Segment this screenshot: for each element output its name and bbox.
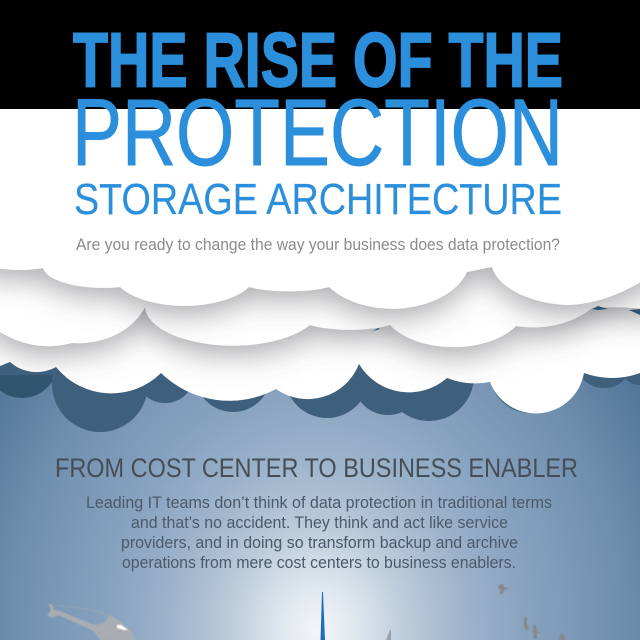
title: [72, 18, 563, 224]
section body text: [86, 493, 552, 572]
icon: flying birds: [498, 584, 566, 640]
section heading: FROM COST CENTER TO BUSINESS ENABLER: [55, 453, 578, 483]
icon: blue spire: [320, 592, 325, 640]
section body text: Leading IT teams don’t think of data protection in traditional terms: [86, 493, 552, 512]
section body text: and that’s no accident. They think and act like service: [131, 513, 508, 532]
icon: distant gray spire: [386, 630, 391, 640]
section body text: operations from mere cost centers to business enablers.: [122, 553, 516, 572]
small dark gaps in the cloud: [371, 306, 640, 332]
white cloud: lower layer: [0, 60, 640, 413]
sky background: [0, 340, 640, 640]
white cloud: top layer: [0, 267, 640, 335]
black top band: [0, 0, 640, 109]
subtitle: Are you ready to change the way your business does data protection?: [76, 235, 560, 254]
section body text: providers, and in doing so transform backup and archive: [121, 533, 518, 552]
dark storm clouds: [0, 326, 640, 432]
shaded upper cloud layers: [0, 267, 640, 374]
icon: helicopter: [47, 604, 135, 640]
title line 3: STORAGE ARCHITECTURE: [74, 175, 562, 224]
white cloud: middle layer: [0, 307, 640, 374]
